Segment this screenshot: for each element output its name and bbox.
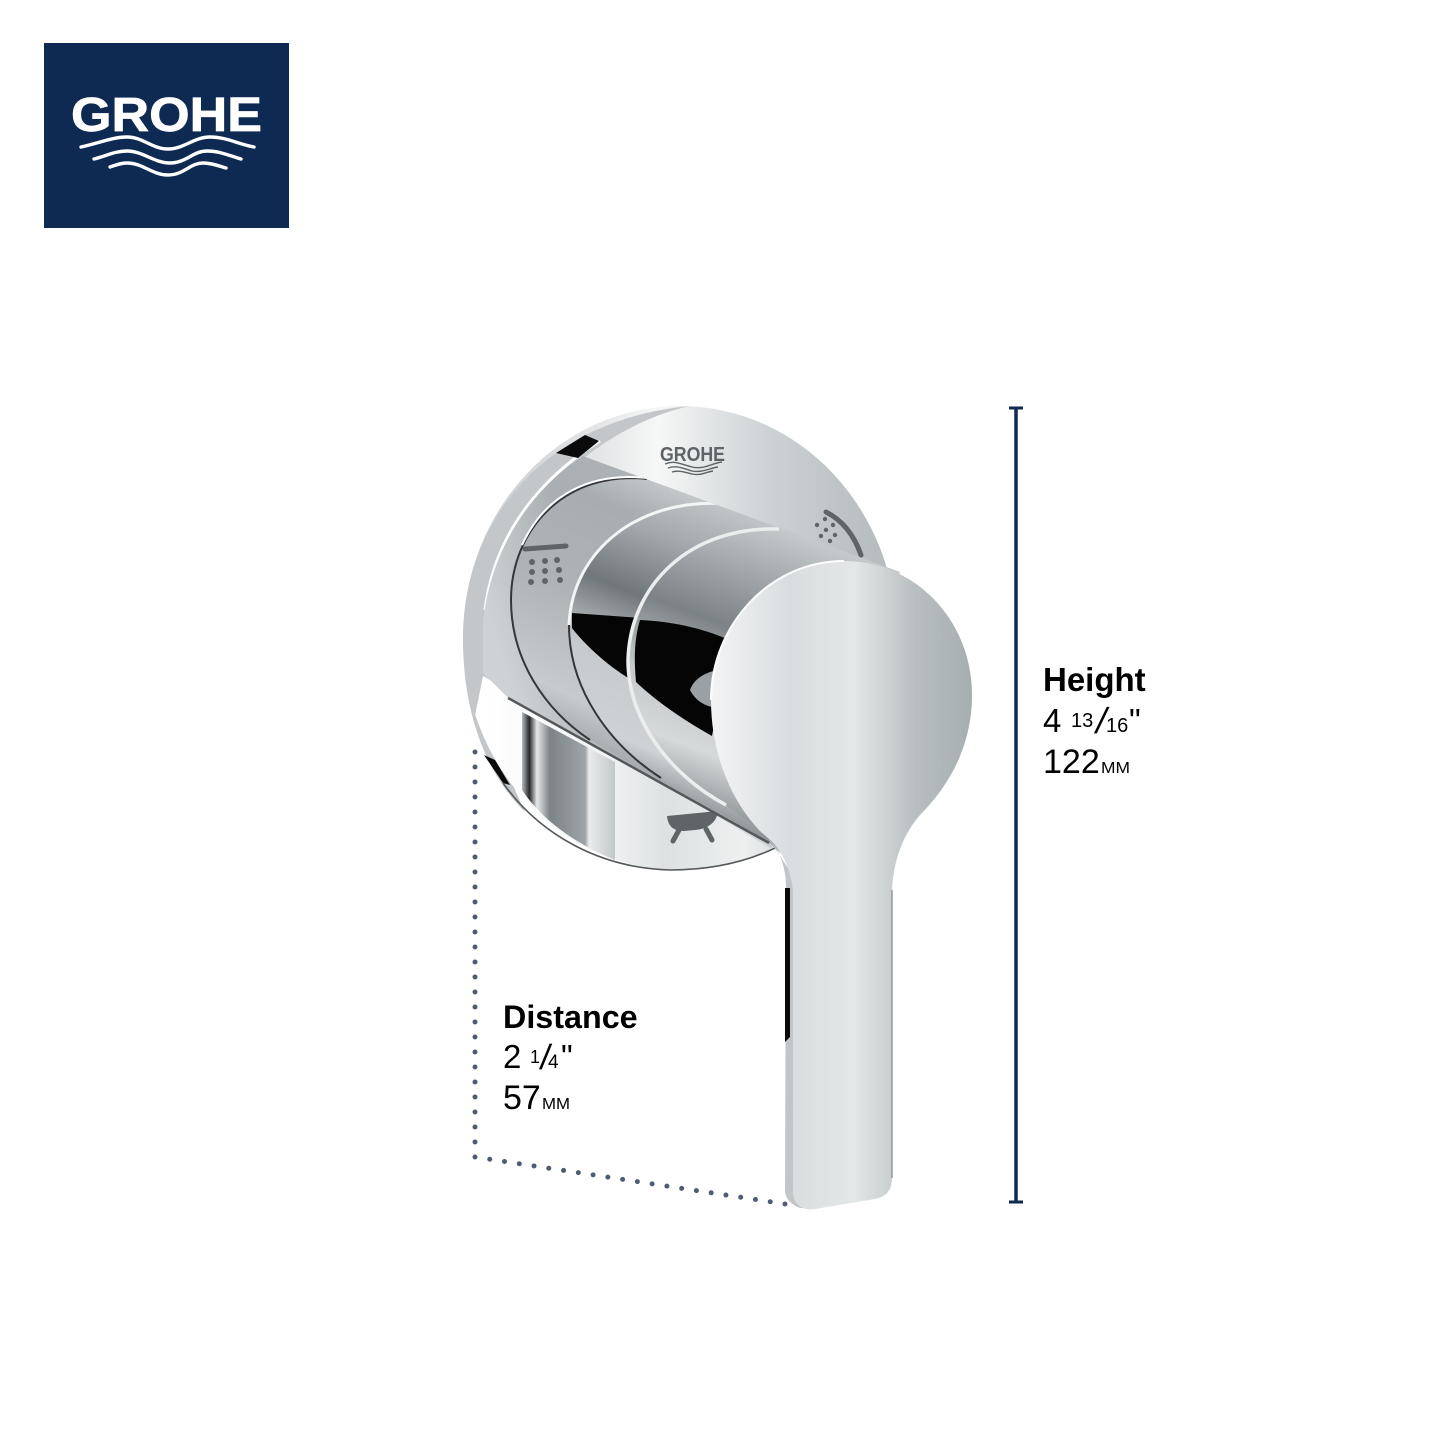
plate engraving: bathtub icon bbox=[667, 811, 718, 841]
distance millimetres value: MM bbox=[542, 1096, 570, 1113]
distance millimetres value: 57 bbox=[503, 1079, 541, 1117]
distance inches value: / bbox=[538, 1038, 553, 1077]
logo waves bbox=[81, 137, 254, 175]
wedge lower edge highlight bbox=[508, 698, 769, 843]
collar three bbox=[630, 586, 749, 819]
height inches value: / bbox=[1092, 700, 1112, 741]
distance inches value bbox=[503, 1038, 573, 1077]
distance label: Distance bbox=[503, 999, 638, 1035]
collar engraving: overhead shower icon bbox=[525, 546, 566, 585]
height dimension bar bbox=[1009, 407, 1023, 1203]
handle side face bbox=[768, 838, 812, 1208]
wall plate disc bbox=[463, 406, 897, 880]
height inches value: 13 bbox=[1071, 710, 1093, 732]
logo: GROHE brand panel bbox=[44, 43, 289, 228]
collar one bbox=[512, 479, 860, 846]
height inches value: 16 bbox=[1106, 715, 1128, 737]
height millimetres value: 122 bbox=[1043, 743, 1100, 781]
height inches value: " bbox=[1129, 702, 1141, 739]
distance millimetres value bbox=[503, 1079, 570, 1117]
height millimetres value bbox=[1043, 743, 1130, 781]
dotted distance guide bbox=[475, 752, 785, 1204]
plate engraving: GROHE logo: GROHE bbox=[660, 444, 725, 466]
height inches value: 4 bbox=[1043, 702, 1061, 739]
chrome black reflection bbox=[635, 620, 730, 736]
product illustration: chrome diverter valve bbox=[463, 406, 972, 1209]
lower spout body bbox=[522, 712, 615, 860]
height millimetres value: MM bbox=[1101, 760, 1130, 777]
collar two bbox=[570, 527, 897, 845]
distance inches value: 4 bbox=[548, 1052, 559, 1073]
distance inches value: " bbox=[561, 1038, 573, 1075]
distance inches value: 1 bbox=[530, 1047, 540, 1067]
logo wordmark: GROHE bbox=[71, 89, 262, 142]
height label: Height bbox=[1043, 661, 1146, 698]
height inches value bbox=[1043, 700, 1141, 741]
distance inches value: 2 bbox=[503, 1038, 521, 1075]
base wedge bbox=[483, 456, 900, 870]
angled base wedge and collars bbox=[483, 456, 900, 870]
lever handle bbox=[711, 561, 972, 1209]
plate engraving: GROHE logo bbox=[660, 444, 725, 475]
plate engraving: side shower icon bbox=[815, 512, 861, 555]
